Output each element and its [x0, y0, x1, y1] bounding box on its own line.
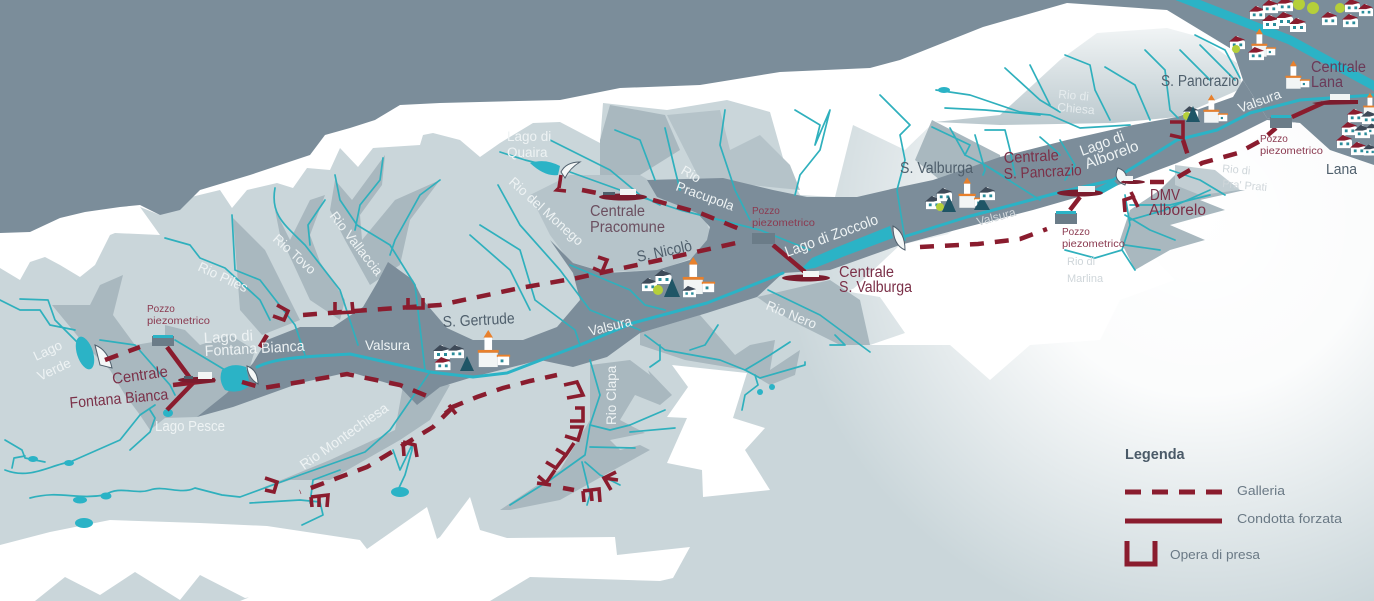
- label: S. Nicolò: S. Nicolò: [635, 238, 694, 266]
- label: Rio Clapa: Rio Clapa: [604, 365, 619, 425]
- lake: Alborelo: [1095, 180, 1118, 195]
- lake: Verde: [72, 334, 98, 372]
- main valley: [197, 80, 1300, 417]
- snow star centre-right: [850, 200, 1175, 380]
- labels: Pracupola: [674, 179, 737, 214]
- label: Rio Vallaccia: Rio Vallaccia: [327, 209, 386, 279]
- lake: Pesce: [163, 409, 173, 417]
- labels: Alborelo: [1149, 202, 1206, 219]
- plant: Alborelo: [1121, 176, 1145, 184]
- plant: Pracomune: [599, 189, 647, 200]
- lake: Zoccolo: [800, 226, 893, 270]
- label: Pozzo piezometrico 2: Pozzo: [752, 206, 780, 217]
- labels: Pracomune: [590, 219, 665, 236]
- labels: piezometrico: [147, 316, 210, 327]
- village: S. Valburga: [925, 177, 995, 212]
- label: Rio Tovo: Rio Tovo: [270, 231, 319, 277]
- label: Lago Verde: Lago: [31, 337, 64, 364]
- label: Centrale Fontana Bianca: Centrale: [111, 363, 169, 388]
- label: Valsura west: Valsura: [365, 337, 410, 353]
- labels: Fontana Bianca: [69, 386, 169, 412]
- labels: piezometrico: [1260, 146, 1323, 157]
- label: Pozzo piezometrico 3: Pozzo: [1062, 227, 1090, 238]
- galleries dashed: [105, 128, 1276, 492]
- light mountains: [0, 100, 960, 601]
- labels: Fontana Bianca: [204, 338, 306, 360]
- label: Lago di Zoccolo: Lago di Zoccolo: [783, 211, 880, 261]
- river: Adige: [1175, 0, 1374, 88]
- labels: Chiesa: [1057, 100, 1095, 117]
- plant: S. Pancrazio: [1057, 186, 1103, 196]
- label: Rio Nero: Rio Nero: [764, 298, 819, 332]
- label: Rio di Pra faint: Rio di: [1222, 163, 1251, 177]
- legend title: Legenda: [1125, 447, 1186, 463]
- legend: [1125, 447, 1343, 564]
- label: S. Valburga: S. Valburga: [900, 160, 973, 177]
- legend: Galleria: Galleria: [1237, 483, 1286, 498]
- label: Rio del Monego: Rio del Monego: [506, 174, 586, 249]
- label: Centrale Lana: Centrale: [1311, 59, 1366, 76]
- legend: Opera di presa: [1127, 541, 1261, 564]
- label: Rio Pracupola: Rio: [678, 163, 704, 186]
- shafts: [152, 115, 1292, 346]
- legend: Opera di presa: Opera di presa: [1170, 547, 1261, 562]
- labels: Quaira: [507, 145, 548, 160]
- plant: Fontana Bianca: [178, 372, 216, 383]
- snow patch centre: [667, 365, 770, 497]
- label: Rio di Marlina faint: Rio di: [1067, 256, 1095, 268]
- labels: piezometrico: [1062, 239, 1125, 250]
- village: S. Nicolò: [641, 257, 715, 297]
- label: Lago Pesce: Lago Pesce: [155, 418, 225, 435]
- label: Lago di Alborelo: Lago di: [1078, 128, 1127, 160]
- label: S. Gertrude: S. Gertrude: [442, 310, 515, 331]
- labels: Pra' Prati: [1222, 178, 1268, 194]
- pale mountains right: [935, 28, 1243, 125]
- label: Pozzo piezometrico 4: Pozzo: [1260, 134, 1288, 145]
- penstocks: [167, 103, 1323, 410]
- label: Lago di Quaira: Lago di: [507, 129, 551, 144]
- labels: S. Valburga: [839, 279, 912, 296]
- label: Rio di Chiesa: Rio di: [1058, 87, 1090, 104]
- label: Rio Piles: Rio Piles: [196, 259, 251, 295]
- village: Lana: [1249, 0, 1374, 155]
- river ends: [28, 87, 950, 528]
- label: DMV Alborelo: DMV: [1150, 187, 1181, 204]
- lake: Quaira: [530, 161, 560, 175]
- label: Valsura faint: Valsura: [975, 205, 1018, 229]
- lakes: [72, 161, 1118, 417]
- labels: Marlina: [1067, 273, 1104, 285]
- river: Valsura main: [257, 273, 783, 377]
- village: S. Gertrude: [433, 330, 510, 371]
- label: Valsura east: Valsura: [1236, 86, 1284, 116]
- label: Rio Montechiesa: Rio Montechiesa: [297, 399, 391, 472]
- labels: [31, 59, 1366, 472]
- label: Centrale Pracomune: Centrale: [590, 203, 645, 220]
- power plants and surge shafts: [152, 94, 1358, 383]
- label: Lago di Fontana Bianca: Lago di: [203, 327, 253, 347]
- labels: Alborelo: [1083, 138, 1141, 173]
- lake: Fontana Bianca: [221, 365, 250, 392]
- village: upper Lana: [1229, 29, 1310, 89]
- legend: Condotta forzata: Condotta forzata: [1237, 511, 1343, 526]
- village: S. Pancrazio: [1183, 95, 1228, 123]
- label: S. Pancrazio: S. Pancrazio: [1161, 73, 1239, 90]
- label: Lana: Lana: [1326, 162, 1358, 178]
- sky dark area: [0, 0, 1374, 233]
- side valleys mid grey: [52, 105, 1245, 510]
- plant: S. Valburga: [782, 271, 830, 282]
- label: Centrale S. Valburga: Centrale: [839, 264, 894, 281]
- labels: Verde: [35, 355, 73, 384]
- plant: Lana: [1312, 94, 1358, 105]
- label: Centrale S. Pancrazio: Centrale: [1003, 147, 1059, 167]
- dams: [95, 162, 1126, 384]
- label: Pozzo piezometrico 1: Pozzo: [147, 304, 175, 315]
- Pracomune lens: [530, 175, 712, 272]
- labels: piezometrico: [752, 218, 815, 229]
- label: Valsura mid: Valsura: [587, 313, 634, 339]
- rivers side: [0, 35, 1240, 525]
- labels: Lana: [1311, 74, 1343, 91]
- labels: S. Pancrazio: [1003, 162, 1082, 183]
- mountains bottom: snow patch left: [0, 497, 690, 601]
- snow band: [0, 0, 1374, 300]
- intake works: [265, 122, 1183, 507]
- river: Valsura upper: [900, 95, 1374, 238]
